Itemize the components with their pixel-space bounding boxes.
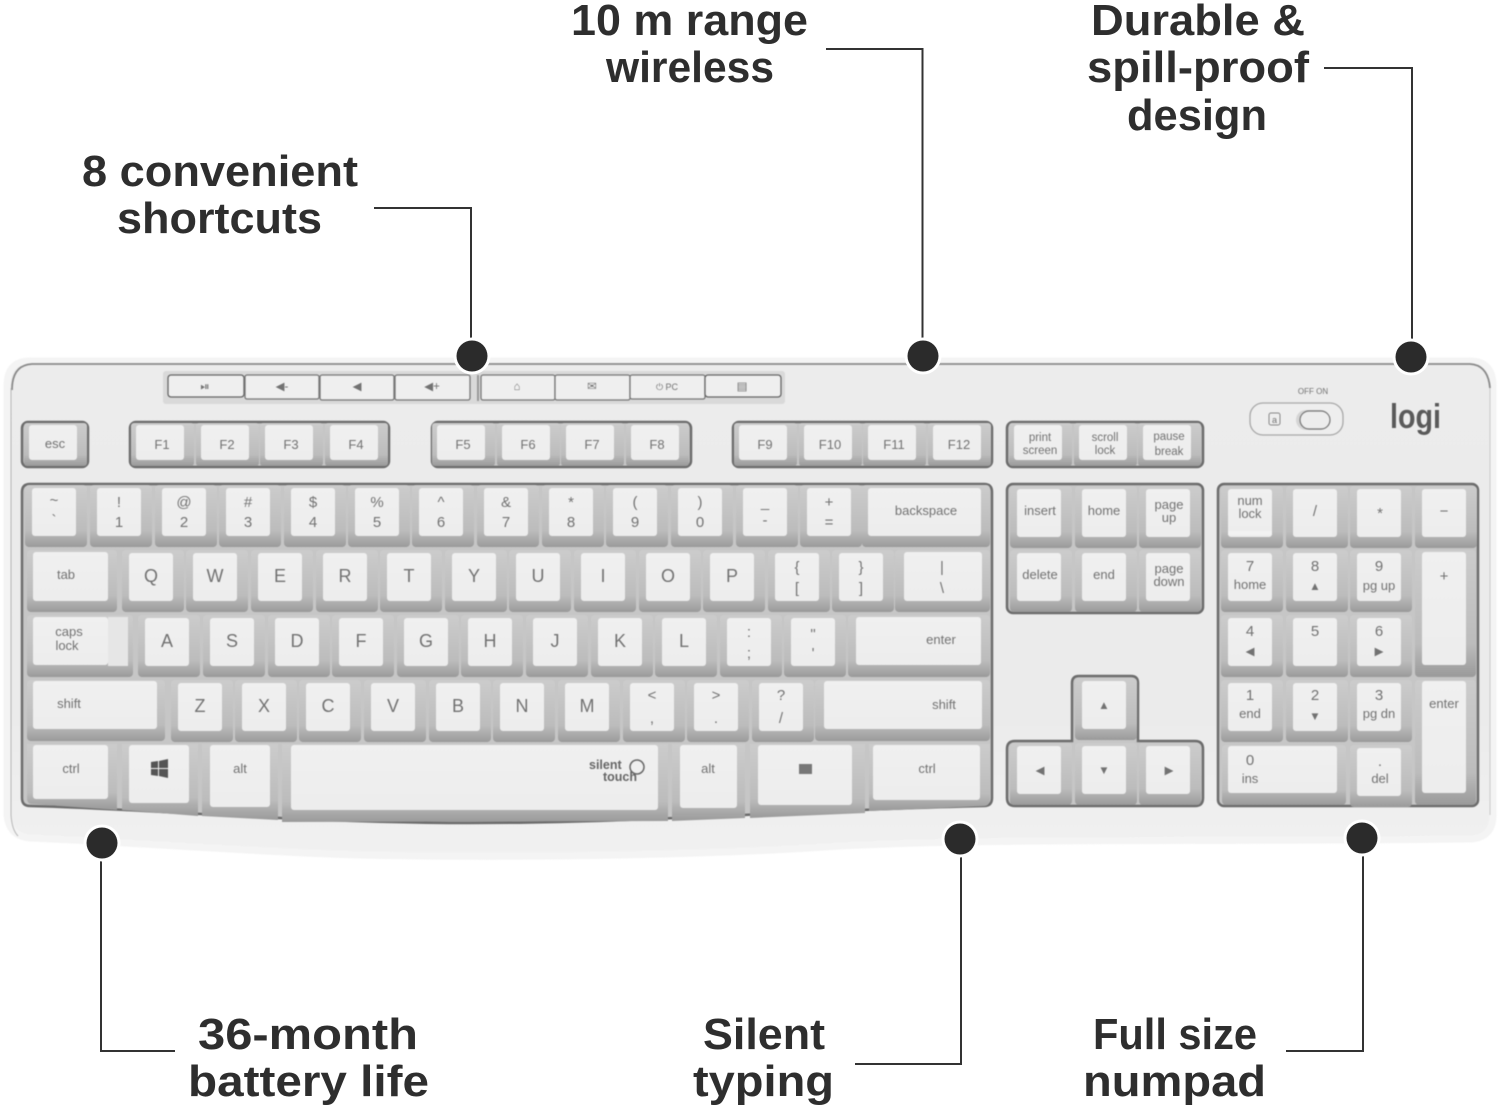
bottom letter row: shift [57, 696, 81, 711]
callout: 8 convenient shortcuts: 8 convenient [82, 147, 358, 196]
number row: * [568, 494, 574, 511]
numeric keypad: 3 [1375, 687, 1383, 704]
number row: - [762, 512, 768, 529]
callout: 36-month battery life: 36-month [198, 1010, 418, 1059]
home row: K [614, 631, 626, 651]
shortcut key row: ◀+ [424, 381, 440, 393]
number row: _ [760, 494, 770, 511]
numeric keypad: ◀ [1246, 646, 1256, 658]
function key row: F11 [883, 437, 905, 452]
navigation key cluster: page [1155, 561, 1183, 576]
bottom letter row: shift [932, 697, 956, 712]
power switch [1250, 387, 1343, 435]
QWERTY row: tab [57, 567, 75, 582]
function key row: F7 [584, 437, 600, 452]
function key row [22, 422, 1203, 467]
numeric keypad: 0 [1246, 752, 1254, 769]
number row: 9 [631, 514, 639, 531]
QWERTY row: I [600, 566, 606, 586]
bottom letter row: . [714, 710, 718, 727]
numeric keypad: 7 [1246, 558, 1254, 575]
QWERTY row: } [858, 559, 864, 576]
number row: ( [632, 494, 638, 511]
panel: keyboard [7, 361, 1493, 856]
number row: 3 [244, 514, 252, 531]
callout: silent typing [693, 820, 978, 1106]
function key row: F5 [455, 437, 471, 452]
QWERTY row: [ [795, 580, 800, 597]
function key row: esc [45, 436, 66, 451]
numeric keypad: pg up [1363, 578, 1395, 593]
numeric keypad: num [1237, 493, 1263, 508]
number row: @ [176, 494, 192, 511]
navigation key cluster: insert [1024, 503, 1056, 518]
number row [25, 485, 990, 547]
shortcut key row: ⏻ PC [656, 382, 679, 392]
numeric keypad: / [1313, 503, 1318, 520]
shortcut key row: ▤ [737, 381, 748, 393]
power switch: a [1272, 415, 1277, 425]
home row: H [484, 631, 496, 651]
bottom letter row: B [452, 696, 464, 716]
function key row: F6 [520, 437, 536, 452]
QWERTY row: T [404, 566, 414, 586]
QWERTY row: U [532, 566, 544, 586]
numeric keypad: 8 [1311, 558, 1319, 575]
QWERTY row [27, 550, 990, 612]
bottom letter row: , [650, 710, 654, 727]
QWERTY row: R [338, 566, 352, 586]
keyboard body [7, 361, 1493, 856]
numeric keypad: home [1234, 577, 1266, 592]
QWERTY row: Y [468, 566, 480, 586]
space bar logo: silent [589, 758, 622, 772]
callout: durable and spill-proof design: design [1127, 91, 1267, 140]
QWERTY row: ] [859, 580, 863, 597]
bottom letter row: > [712, 687, 721, 704]
navigation key cluster: home [1088, 503, 1120, 518]
arrow key cluster: ▶ [1165, 765, 1175, 777]
numeric keypad: 2 [1311, 687, 1319, 704]
navigation key cluster: up [1162, 510, 1176, 525]
bottom letter row: ? [777, 687, 785, 704]
number row: ! [117, 494, 121, 511]
space bar row: ctrl [918, 761, 936, 776]
home row: S [226, 631, 238, 651]
number row: ~ [50, 492, 59, 509]
shortcut key row [163, 371, 785, 404]
space bar row [27, 744, 990, 822]
function key row: F10 [819, 437, 841, 452]
function key row: break [1155, 446, 1184, 458]
numeric keypad: 1 [1246, 687, 1254, 704]
shortcut key row: ⏯ [200, 381, 210, 393]
home row [27, 615, 990, 677]
QWERTY row: { [794, 559, 800, 576]
callout: 10 m range wireless [571, 0, 942, 374]
QWERTY row: | [940, 559, 944, 576]
numeric keypad: + [1440, 568, 1449, 585]
numeric keypad: ins [1242, 771, 1259, 786]
space bar row: ctrl [62, 761, 80, 776]
function key row: F8 [649, 437, 665, 452]
arrow key cluster [1007, 676, 1203, 806]
function key row: F4 [348, 437, 364, 452]
number row: ` [52, 512, 56, 529]
navigation key cluster [1007, 484, 1203, 613]
number row: = [825, 514, 834, 531]
bottom letter row: N [516, 696, 528, 716]
numeric keypad: lock [1238, 506, 1262, 521]
navigation key cluster: end [1093, 567, 1115, 582]
QWERTY row: O [661, 566, 675, 586]
number row: 1 [115, 514, 123, 531]
home row: ' [812, 645, 815, 662]
QWERTY row: E [274, 566, 286, 586]
callout: durable and spill-proof design: spill-proof [1087, 43, 1309, 92]
number row: $ [309, 494, 318, 511]
number row: + [825, 494, 834, 511]
number row: 5 [373, 514, 381, 531]
QWERTY row: W [206, 566, 224, 586]
number row: backspace [895, 503, 957, 518]
bottom letter row [27, 680, 990, 742]
callout: silent typing: Silent [703, 1010, 825, 1059]
bottom letter row: M [580, 696, 594, 716]
bottom letter row: X [258, 696, 270, 716]
numeric keypad: 9 [1375, 558, 1383, 575]
bottom letter row: V [387, 696, 399, 716]
home row: L [679, 631, 689, 651]
callout: full size numpad: Full size [1093, 1010, 1257, 1059]
home row: enter [926, 632, 956, 647]
numeric keypad: ▲ [1309, 581, 1321, 593]
home row: G [419, 631, 433, 651]
space bar row: alt [233, 761, 247, 776]
numeric keypad: end [1239, 706, 1261, 721]
QWERTY row: \ [940, 580, 945, 597]
bottom letter row: C [322, 696, 334, 716]
home row: caps [55, 624, 83, 639]
number row: 8 [567, 514, 575, 531]
icon: menu key [799, 764, 812, 774]
callout: 36-month battery life [84, 824, 429, 1106]
numeric keypad: ▼ [1309, 711, 1321, 723]
shortcut key row: ⌂ [514, 381, 520, 393]
callout: full size numpad [1083, 820, 1380, 1106]
shortcut key row: ◀- [276, 381, 289, 393]
function key row: F2 [219, 437, 235, 452]
function key row: F9 [757, 437, 773, 452]
shortcut key row: ◀ [353, 381, 363, 393]
function key row: pause [1153, 431, 1185, 443]
icon: windows logo [151, 759, 168, 778]
bottom letter row: < [648, 687, 657, 704]
home row: D [290, 631, 304, 651]
number row: 4 [309, 514, 317, 531]
navigation key cluster: down [1153, 574, 1185, 589]
home row: lock [55, 638, 79, 653]
space bar logo: touch [603, 770, 637, 784]
arrow key cluster: ◀ [1036, 765, 1046, 777]
number row: & [501, 494, 511, 511]
navigation key cluster: page [1155, 497, 1183, 512]
function key row: F1 [154, 437, 170, 452]
number row: 6 [437, 514, 445, 531]
space bar row: alt [701, 761, 715, 776]
power switch: OFF ON [1298, 387, 1328, 396]
numeric keypad: . [1378, 753, 1382, 770]
numeric keypad: pg dn [1363, 706, 1395, 721]
numeric keypad [1218, 484, 1478, 807]
callout: silent typing: typing [693, 1057, 834, 1106]
numeric keypad: del [1371, 771, 1389, 786]
numeric keypad: 5 [1311, 623, 1319, 640]
callout: full size numpad: numpad [1083, 1057, 1266, 1106]
number row: ) [698, 494, 702, 511]
function key row: lock [1095, 445, 1115, 457]
bottom letter row: Z [194, 696, 206, 716]
numeric keypad: enter [1429, 696, 1459, 711]
home row: J [550, 631, 560, 651]
arrow key cluster: ▲ [1098, 700, 1110, 712]
home row: A [161, 631, 173, 651]
function key row: screen [1023, 445, 1057, 457]
callout: 8 convenient shortcuts [82, 147, 490, 374]
home row: : [747, 624, 751, 641]
callout: durable and spill-proof design [1087, 0, 1430, 376]
shortcut key row: ✉ [587, 381, 597, 393]
main key block [22, 484, 992, 823]
number row: 2 [180, 514, 188, 531]
callout: 8 convenient shortcuts: shortcuts [117, 194, 322, 243]
numeric keypad: * [1377, 505, 1383, 522]
numeric keypad: − [1440, 503, 1449, 520]
number row: % [370, 494, 384, 511]
arrow key cluster: ▼ [1098, 765, 1110, 777]
home row: " [810, 626, 816, 643]
numeric keypad: 6 [1375, 623, 1383, 640]
callout: 10 m range wireless: wireless [605, 43, 774, 92]
space bar logo [589, 758, 644, 784]
home row: F [356, 631, 366, 651]
function key row: F3 [283, 437, 299, 452]
function key row: scroll [1092, 432, 1118, 444]
function key row: F12 [948, 437, 970, 452]
QWERTY row: P [726, 566, 738, 586]
logo: logi [1390, 398, 1441, 436]
number row: 0 [696, 514, 704, 531]
navigation key cluster: delete [1022, 567, 1058, 582]
function key row: print [1029, 432, 1052, 444]
numeric keypad: 4 [1246, 623, 1254, 640]
callout: 36-month battery life: battery life [188, 1057, 429, 1106]
numeric keypad: ▶ [1375, 646, 1385, 658]
number row: 7 [502, 514, 510, 531]
home row: ; [747, 645, 751, 662]
bottom letter row: / [779, 710, 784, 727]
QWERTY row: Q [144, 566, 158, 586]
number row: # [244, 494, 253, 511]
number row: ^ [437, 494, 445, 511]
